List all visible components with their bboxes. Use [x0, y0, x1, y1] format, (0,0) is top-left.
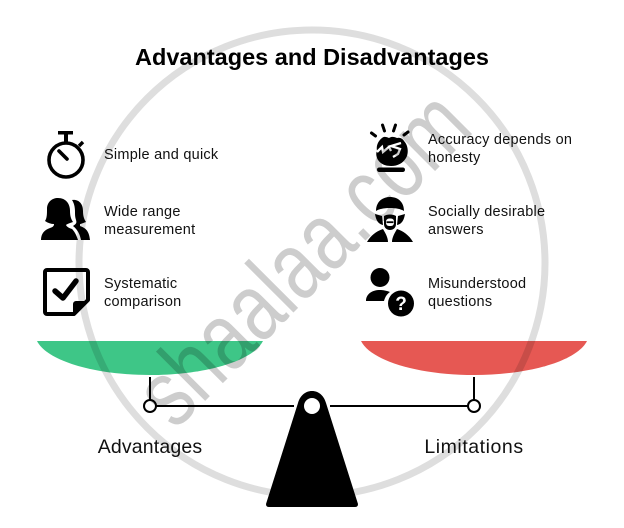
text: socially desirable answers: answers [428, 222, 484, 238]
red pan [361, 341, 587, 375]
title: Advantages and Disadvantages [135, 44, 489, 70]
text: wide range measurement: measurement [104, 222, 195, 238]
green pan [37, 341, 263, 375]
text: misunderstood questions: questions [428, 294, 492, 310]
fulcrum [266, 391, 358, 507]
text: systematic comparison [104, 276, 181, 310]
text: accuracy depends on honesty: honesty [428, 150, 481, 166]
text: systematic comparison: comparison [104, 294, 181, 310]
icon: checklist note [43, 268, 90, 316]
icon: stopwatch [47, 131, 85, 179]
text: misunderstood questions [428, 276, 526, 310]
icon: person with question mark [366, 268, 414, 316]
text: misunderstood questions: Misunderstood [428, 276, 526, 292]
label: advantages: Advantages [98, 436, 202, 458]
text: wide range measurement: Wide range [104, 204, 181, 220]
icon: masked person [367, 197, 413, 242]
text: wide range measurement [104, 204, 196, 238]
label: limitations: Limitations [424, 436, 524, 458]
icon: exploding heart on stand [370, 124, 410, 172]
text: socially desirable answers [428, 204, 545, 238]
text: systematic comparison: Systematic [104, 276, 177, 292]
text: simple and quick: Simple and quick [104, 147, 218, 163]
text: accuracy depends on honesty: Accuracy depends on [428, 132, 572, 148]
text: socially desirable answers: Socially desirable [428, 204, 545, 220]
beam and hangers [144, 377, 480, 412]
icon: person with question mark: ? [395, 294, 407, 315]
text: accuracy depends on honesty [428, 132, 572, 166]
icon: two people [41, 198, 90, 240]
